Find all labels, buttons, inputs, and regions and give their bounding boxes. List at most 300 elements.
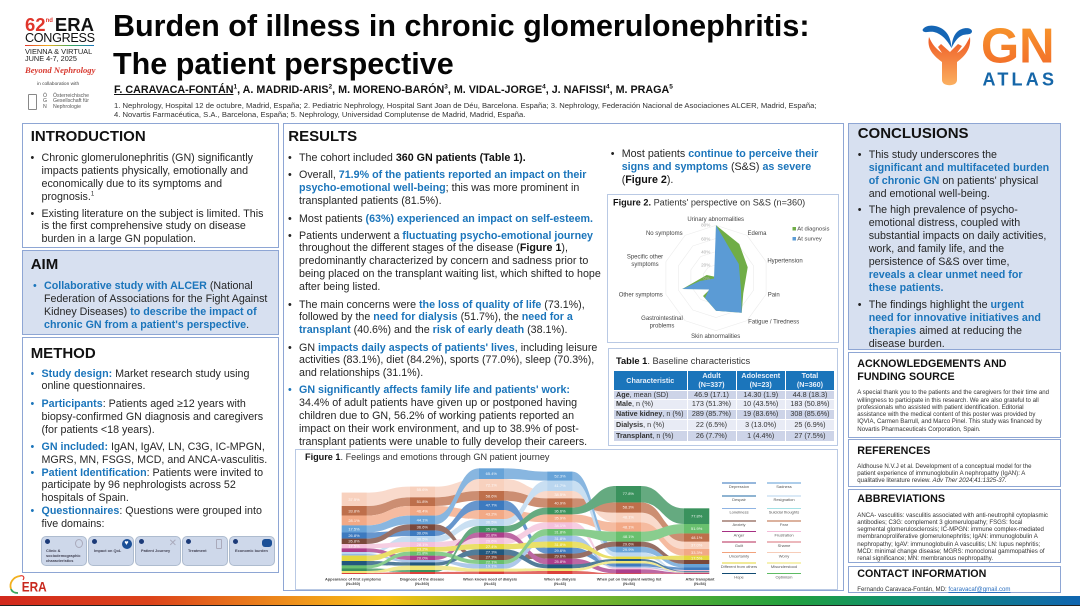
table 1: baseline characteristics: 183 (50.8%) — [790, 400, 830, 408]
text: patient identification: participate by 96 nephrologists across 52 — [42, 479, 236, 491]
text: conclusion 3: need for innovative initiatives and — [869, 312, 1041, 324]
footer black line — [0, 604, 1080, 606]
GN Atlas logo: GN — [981, 20, 1054, 74]
sankey percentage labels: 36.5% — [486, 520, 497, 525]
sankey percentage labels: 28.1% — [417, 542, 428, 547]
table 1: baseline characteristics: Age, mean (SD) — [616, 390, 668, 399]
congress logo: Österreichische — [53, 93, 89, 99]
axis labels: Urinary abnormalities — [687, 217, 744, 223]
text: conclusion 2: reveals a clear unmet need for — [869, 269, 1023, 281]
congress logo: Beyond Nephrology — [25, 65, 95, 75]
text: conclusion 2: substantial impacts on daily activities, — [869, 230, 1046, 242]
text: study design: online questionnaires. — [42, 380, 145, 392]
sankey percentage labels: 43.2% — [486, 512, 497, 517]
text: signs and symptoms: signs and symptoms (S&S) as severe — [622, 161, 811, 173]
text: family and work — [299, 384, 587, 449]
legend: Fear — [780, 522, 789, 527]
sankey percentage labels: 77.8% — [691, 514, 703, 519]
text: reference: patient experience of immunoglobulin A nephropathy (IgAN): A — [857, 470, 1025, 477]
text: literature gap: is the first comprehensive study on disease — [42, 220, 246, 232]
sankey percentage labels: 30.5% — [417, 536, 428, 541]
text: acknowledgements: A special thank you to the patients and the caregivers for their time and — [857, 389, 1049, 396]
text: abbreviations — [857, 512, 1048, 562]
axis labels: Appearance of first symptoms — [325, 577, 381, 582]
text: aim statement: Kidney Diseases) to describe the impact of — [44, 306, 257, 318]
heading: aim: AIM — [31, 256, 58, 273]
sankey percentage labels: 36.6% — [417, 525, 428, 530]
table 1: baseline characteristics: 10 (43.5%) — [743, 400, 778, 408]
figure 2: radar chart — [607, 194, 839, 343]
text: aim statement — [44, 280, 267, 332]
table 1 box — [608, 348, 838, 446]
legend — [721, 483, 801, 580]
sankey percentage labels: 26.8% — [348, 533, 360, 538]
text: acknowledgements — [857, 389, 1049, 433]
text: conclusion 1: and emotional well-being. — [869, 188, 990, 200]
text: literature gap — [42, 208, 263, 246]
domain 1: Clinic & — [46, 548, 60, 553]
legend: Sadness — [776, 484, 792, 489]
affiliations: 1. Nephrology, Hospital 12 de octubre, Madrid, España; 2. Pediatric Nephrology, Hospital Sant Joan de Déu, Barcelona. España; 3. Nephrology, Federación Nacional de Asociaciones ALCER, Madrid, España; — [114, 101, 816, 110]
congress logo: VIENNA & VIRTUAL — [25, 46, 92, 56]
affiliations — [114, 101, 816, 119]
axis labels: Hypertension — [767, 259, 803, 265]
text: reference — [857, 463, 1032, 484]
axis labels: When knows need of dialysis — [463, 577, 517, 582]
text: cohort: The cohort included 360 GN patients (Table 1). — [299, 152, 526, 164]
sankey percentage labels: 22.1% — [486, 559, 497, 564]
congress logo: Ö — [43, 93, 47, 99]
affiliations: 4. Novartis Farmacéutica, S.A., Barcelona, España; 5. Nephrology, Universidad Complutense de Madrid, Madrid, España. — [114, 110, 525, 119]
heading: conclusions: CONCLUSIONS — [858, 125, 969, 142]
text: main concerns: The main concerns were the loss of quality of life (73.1%), — [299, 299, 585, 311]
table 1 title: Table 1. Baseline characteristics — [616, 356, 750, 366]
axis labels: (N=43) — [484, 581, 497, 586]
table 1: baseline characteristics: 22 (6.5%) — [696, 420, 727, 429]
sankey percentage labels: 17.5% — [348, 526, 360, 531]
sankey percentage labels: 35.8% — [486, 526, 497, 531]
text: family and work: 34.4% of adult patients have given up or postponed having — [299, 397, 577, 409]
axis labels: Other symptoms — [619, 293, 663, 299]
axis labels: Fatigue / Tiredness — [748, 320, 799, 326]
text: abbreviations: MCD: minimal change disease; MGRS: monoclonal gammopathies of — [857, 548, 1045, 555]
congress logo: CONGRESS — [25, 31, 95, 45]
text: participants: biopsy-confirmed GN diagnosis and caregivers — [42, 411, 263, 423]
text: conclusion 2: The high prevalence of psycho- — [869, 204, 1018, 216]
series: at diagnosis — [682, 225, 748, 313]
table 1: baseline characteristics: 19 (83.6%) — [743, 409, 778, 418]
text: acknowledgements: IQVIA, Carmen Barrull, and Marco Pinel. This study was financed by — [857, 418, 1042, 425]
text: GN included: GN included: IgAN, IgAV, LN, C3G, IC-MPGN, — [42, 441, 265, 453]
legend: Anxiety — [732, 522, 746, 527]
heading: abbreviations: ABBREVIATIONS — [857, 493, 945, 505]
heading: method: METHOD — [31, 345, 96, 362]
axis labels: When on dialysis — [544, 577, 576, 582]
table 1: baseline characteristics: (N=360) — [797, 380, 823, 389]
text: GN impact: impacts patients physically, emotionally and — [42, 165, 248, 177]
table 1: baseline characteristics: (N=337) — [698, 380, 725, 389]
sankey percentage labels: 31.8% — [554, 536, 566, 541]
text: patient identification — [42, 467, 263, 505]
text: main concerns: transplant (40.6%) and the risk of early death (38.1%). — [299, 324, 568, 336]
congress logo: JUNE 4-7, 2025 — [25, 54, 77, 62]
legend: Guilt — [735, 543, 744, 548]
sankey percentage labels: 52.3% — [554, 473, 566, 478]
sankey percentage labels: 29.6% — [623, 541, 634, 546]
text: GN impact: prognosis.1 — [42, 191, 94, 203]
panel: results — [283, 123, 844, 591]
text: abbreviations: membranoproliferative glomerulonephritis; IgAN: immunoglobulin A — [857, 533, 1038, 540]
sankey percentage labels: 48.1% — [623, 524, 634, 529]
congress logo: Nephrologie — [53, 104, 81, 110]
sankey percentage labels: 72.1% — [486, 482, 497, 487]
text: conclusion 2: these patients. — [869, 282, 944, 294]
sankey percentage labels: 47.7% — [486, 503, 497, 508]
sankey percentage labels: 51.9% — [691, 526, 703, 531]
sankey percentage labels: 48.1% — [623, 534, 634, 539]
sankey percentage labels: 36.6% — [554, 508, 566, 513]
panel: abbreviations — [848, 489, 1061, 563]
sankey percentage labels: 33.8% — [348, 508, 360, 513]
axis labels: No symptoms — [646, 231, 683, 237]
axis labels: Edema — [747, 231, 767, 237]
domain 2 — [88, 536, 134, 566]
sankey percentage labels: 65.4% — [486, 471, 497, 476]
text: conclusion 1 — [869, 149, 1049, 200]
table 1: baseline characteristics: 1 (4.4%) — [747, 431, 774, 440]
congress logo: N — [43, 104, 47, 110]
sankey percentage labels: 31.8% — [554, 530, 566, 535]
axis labels: Specific other — [627, 255, 663, 261]
tick labels: 20% — [701, 262, 710, 268]
heading: results: RESULTS — [288, 128, 357, 145]
text: conclusion 1: of chronic GN on patients' physical — [869, 175, 1038, 187]
legend: Resignation — [773, 497, 795, 502]
heading: introduction: INTRODUCTION — [31, 128, 146, 145]
figure 2 title: Figure 2. Patients' perspective on S&S (n=360) — [613, 198, 805, 208]
sankey percentage labels: 38.5% — [554, 492, 566, 497]
text: daily aspects: and relationships (31.1%). — [299, 367, 423, 379]
sankey percentage labels: 41.7% — [554, 483, 566, 488]
table 1: baseline characteristics: 26 (7.7%) — [696, 431, 727, 440]
panel: conclusions — [848, 123, 1061, 350]
axis labels: problems — [650, 323, 674, 329]
text: conclusion 3 — [869, 299, 1041, 350]
ERA logo — [10, 575, 47, 594]
sankey percentage labels: 23.2% — [417, 547, 428, 552]
figure 1: sankey chart — [295, 449, 838, 590]
legend: Depression — [729, 484, 749, 489]
legend: Hope — [734, 574, 745, 580]
heading: contact: CONTACT INFORMATION — [857, 568, 986, 580]
table 1: baseline characteristics: 14.30 (1.9) — [743, 390, 778, 399]
sankey percentage labels: 40.9% — [554, 500, 566, 505]
congress logo: G — [43, 98, 47, 104]
text: family and work: impact on their work environment, and up to 38.9% of post- — [299, 423, 579, 435]
text: literature gap: Existing literature on the subject is limited. This — [42, 208, 263, 220]
text: GN included: MGRS, MN, FSGS, MCD, and ANCA-vasculitis. — [42, 454, 267, 466]
congress logo: in collaboration with — [37, 82, 79, 86]
sankey percentage labels: 21.8% — [417, 551, 428, 556]
panel: acknowledgements — [848, 352, 1061, 438]
congress logo: Gesellschaft für — [53, 98, 89, 104]
figure 1 title: Figure 1. Feelings and emotions through GN patient journey — [305, 452, 550, 462]
text: abbreviations: renal significance; MN: membranous nephropathy. — [857, 555, 993, 562]
table 1: baseline characteristics: 173 (51.3%) — [692, 400, 731, 408]
sankey percentage labels: 20.0% — [417, 555, 428, 560]
legend: Anger — [734, 532, 745, 538]
domain 2: ♥ — [124, 540, 129, 547]
text: GN included — [42, 441, 267, 467]
table 1: baseline characteristics: 3 (13.0%) — [745, 420, 776, 429]
text: participants: Participants: Patients aged ≥12 years with — [42, 398, 246, 410]
axis labels: (N=54) — [623, 581, 636, 586]
text: journey: being placed on the transplant waiting list, which shifted to hope — [299, 268, 601, 280]
table 1: baseline characteristics: 46.9 (17.1) — [694, 390, 729, 399]
panel: references — [848, 439, 1061, 487]
legend: Despair — [732, 497, 747, 502]
rainbow footer bar — [0, 596, 1080, 604]
text: conclusion 2 — [869, 204, 1046, 295]
axis labels: (N=360) — [346, 581, 361, 586]
text: acknowledgements: willingness to participate in this research. We are also grateful to all — [857, 397, 1039, 404]
title: The patient perspective — [113, 47, 454, 81]
table 1: baseline characteristics: (N=23) — [750, 380, 772, 389]
text: GN impact — [42, 152, 253, 204]
table 1: baseline characteristics: Transplant, n (%) — [616, 431, 674, 440]
text: family and work: children due to GN, 56.2% of working patients reported an — [299, 410, 574, 422]
text: aim statement: Federation of Associations for the Fight Against — [44, 293, 267, 305]
axis labels: (N=54) — [694, 581, 707, 586]
sankey percentage labels: 17.5% — [348, 544, 360, 549]
domain 1: characteristics — [46, 558, 73, 563]
text: conclusion 3: disease burden. — [869, 338, 945, 350]
sankey column blocks — [342, 468, 709, 574]
sankey percentage labels: 58.3% — [623, 504, 634, 509]
text: reference: qualitative literature review. Adv Ther 2024;41:1325-37. — [857, 477, 1007, 484]
domain 1: sociodemographic — [46, 553, 81, 558]
tick labels — [701, 223, 710, 281]
panel: aim — [22, 250, 278, 335]
text: acknowledgements: Novartis Pharmaceuticals Corporation, Spain. — [857, 426, 981, 433]
domain 5: Economic burden — [235, 548, 268, 553]
legend — [792, 227, 829, 243]
sankey percentage labels: 48.1% — [691, 535, 703, 540]
text: main concerns: followed by the need for dialysis (51.7%), the need for a — [299, 311, 573, 323]
text: family and work: GN significantly affects family life and patients' work: — [299, 384, 570, 396]
text: GN impact: economically due to its symptoms and — [42, 178, 222, 190]
domain 4 — [182, 536, 228, 566]
axis labels: Skin abnormalities — [691, 334, 740, 340]
table 1: baseline characteristics: 308 (85.6%) — [790, 409, 830, 418]
sankey percentage labels: 27.4% — [486, 544, 497, 549]
sankey percentage labels: 48.1% — [623, 515, 634, 520]
sankey percentage labels: 27.3% — [486, 555, 497, 560]
series: at survey — [682, 225, 742, 313]
heading: references: REFERENCES — [857, 445, 930, 457]
title — [113, 9, 809, 81]
authors: F. CARAVACA-FONTÁN1, A. MADRID-ARIS2, M. MORENO-BARÓN3, M. VIDAL-JORGE4, J. NAFISSI4, M. PRAGA5 — [114, 83, 673, 96]
sankey percentage labels: 29.6% — [554, 553, 566, 558]
table 1: baseline characteristics: 44.8 (18.3) — [793, 390, 827, 399]
text: reference: Aldhouse N.V.J et al. Development of a conceptual model for the — [857, 463, 1032, 470]
domain 3: ✕ — [169, 538, 177, 549]
axis labels: When put on transplant waiting list — [597, 577, 662, 582]
text: abbreviations: antibodies; C3G: complement 3 glomerulopathy; FSGS: focal — [857, 519, 1022, 526]
heading: acknowledgements — [857, 358, 1007, 383]
table 1: baseline characteristics: Native kidney, n (%) — [616, 409, 684, 418]
tick labels: 60% — [701, 236, 710, 242]
tick labels: 40% — [701, 250, 710, 254]
text: self-esteem: Most patients (63%) experienced an impact on self-esteem. — [299, 213, 593, 225]
text: daily aspects: activities (83.1%), diet (84.2%), sports (77.0%), sleep (70.3%), — [299, 354, 594, 366]
text: signs and symptoms: Most patients continue to perceive their — [622, 148, 818, 160]
table 1: baseline characteristics: 27 (7.5%) — [794, 431, 826, 440]
text: acknowledgements: professionals who assisted with patient identification. Editorial — [857, 404, 1024, 411]
table 1: baseline characteristics: Dialysis, n (%) — [616, 420, 664, 429]
legend: At diagnosis — [797, 227, 829, 233]
sankey percentage labels: 19.1% — [486, 564, 497, 569]
legend: Frustration — [774, 532, 794, 538]
sankey percentage labels: 28.1% — [348, 518, 360, 523]
axis labels: symptoms — [631, 262, 659, 268]
legend: Worry — [779, 554, 789, 558]
text: abbreviations: ANCA- vasculitis: vasculitis associated with anti-neutrophil cytoplasmic — [857, 512, 1048, 519]
sankey percentage labels: 31.8% — [554, 542, 566, 547]
text: abbreviations: segmental glomerulosclerosis; IC-MPGN: immune complex-mediated — [857, 526, 1044, 533]
table 1: baseline characteristics: 289 (85.7%) — [692, 409, 731, 418]
sankey percentage labels: 31.8% — [486, 532, 497, 537]
sankey percentage labels: 25.8% — [554, 559, 566, 564]
panel: method — [22, 337, 278, 573]
panel: contact information — [848, 566, 1061, 593]
text: contact: Fernando Caravaca-Fontán, MD: fcaravacaf@gmail.com — [857, 586, 1010, 593]
legend: Misunderstood — [771, 564, 797, 569]
text: literature gap: burden in a large GN population. — [42, 233, 196, 245]
sankey percentage labels: 55.6% — [417, 487, 428, 492]
legend: Loneliness — [729, 510, 749, 514]
axis labels: (N=360) — [415, 581, 430, 586]
sankey percentage labels: 77.8% — [623, 491, 634, 496]
text: journey — [299, 230, 601, 294]
domain 1 — [41, 536, 87, 566]
text: questionnaires: five domains: — [42, 518, 104, 530]
sankey percentage labels: 27.3% — [486, 549, 497, 554]
table 1: baseline characteristics: Male, n (%) — [616, 400, 653, 408]
text: daily aspects — [299, 342, 597, 380]
GN Atlas logo — [922, 20, 1057, 90]
sankey percentage labels: 29.9% — [623, 547, 634, 552]
table 1: baseline characteristics: Total — [802, 371, 818, 380]
legend: Optimism — [776, 574, 793, 580]
sankey percentage labels: 51.8% — [417, 499, 428, 504]
text: journey: predominantly characterized by concern and sadness prior to — [299, 255, 588, 267]
text: abbreviations: nephropathy; IgAV: immunoglobulin A vasculitis; LN: lupus nephritis; — [857, 541, 1040, 548]
axis labels — [619, 217, 803, 340]
tick labels: 0% — [703, 276, 710, 281]
text: conclusion 3: therapies aimed at reducing the — [869, 325, 1022, 337]
domain 4: Treatment — [188, 548, 207, 553]
text: conclusion 1: significant and multifaceted burden — [869, 162, 1049, 174]
domain 5 — [229, 536, 275, 566]
heading: acknowledgements: FUNDING SOURCE — [857, 371, 955, 383]
table 1: baseline characteristics — [614, 371, 834, 441]
axis labels: Diagnose of the disease — [400, 577, 445, 582]
text: aim statement: chronic GN from a patient's perspective. — [44, 319, 249, 331]
text: study design: Study design: Market research study using — [42, 368, 249, 380]
table 1: baseline characteristics: Adolescent — [741, 371, 780, 380]
text: journey: Patients underwent a fluctuating psycho-emotional journey — [299, 230, 593, 242]
sankey percentage labels: 29.6% — [554, 548, 566, 553]
panel: introduction — [22, 123, 278, 248]
text: GN impact: Chronic glomerulonephritis (GN) significantly — [42, 152, 253, 164]
axis labels: Gastrointestinal — [641, 316, 683, 322]
text: patient identification: hospitals of Spain. — [42, 492, 129, 504]
axis labels: Pain — [768, 293, 780, 299]
text: psycho-emotional: Overall, 71.9% of the patients reported an impact on their — [299, 169, 586, 181]
text: psycho-emotional: psycho-emotional well-being; this was more prominent in — [299, 182, 579, 194]
text: signs and symptoms — [622, 148, 818, 187]
sankey percentage labels: 30.0% — [417, 531, 428, 536]
legend: Suicidal thoughts — [769, 510, 799, 514]
text: conclusion 2: emotional distress, coupled with — [869, 217, 1020, 229]
sankey percentage labels: 33.3% — [691, 550, 703, 555]
text: psycho-emotional — [299, 169, 586, 208]
tick labels: 80% — [701, 223, 710, 228]
text: conclusion 1: This study underscores the — [869, 149, 997, 161]
legend: Shame — [778, 543, 791, 548]
sankey percentage labels: 46.4% — [417, 508, 428, 513]
text: study design — [42, 368, 249, 393]
sankey percentage labels: 17.5% — [691, 555, 703, 560]
axis labels: (N=43) — [554, 581, 567, 586]
table 1: baseline characteristics: Characteristic — [626, 376, 674, 385]
text: patient identification: Patient Identification: Patients were invited to — [42, 467, 263, 479]
sankey ribbons — [342, 468, 709, 574]
table 1: baseline characteristics: 25 (6.9%) — [794, 420, 826, 429]
heading: acknowledgements: ACKNOWLEDGEMENTS AND — [857, 358, 1007, 370]
text: psycho-emotional: transplanted patients (81.5%). — [299, 195, 442, 207]
text: journey: after being listed. — [299, 281, 380, 293]
sankey percentage labels: 58.6% — [486, 493, 497, 498]
GN Atlas logo: ATLAS — [982, 70, 1057, 90]
text: acknowledgements: assistance with the medical content of this poster was provided by — [857, 411, 1035, 418]
text: aim statement: Collaborative study with ALCER (National — [44, 280, 253, 292]
text: questionnaires — [42, 505, 262, 531]
title: Burden of illness in chronic glomerulonephritis: — [113, 9, 809, 43]
text: daily aspects: GN impacts daily aspects of patients' lives, including leisure — [299, 342, 597, 354]
sankey percentage labels: 44.1% — [417, 517, 428, 522]
sankey percentage labels: 26.8% — [348, 539, 360, 544]
sankey percentage labels: 37.5% — [348, 497, 360, 502]
domain 3: Patient Journey — [141, 548, 170, 553]
sankey percentage labels: 29.6% — [486, 538, 497, 543]
text: questionnaires: Questionnaires: Questions were grouped into — [42, 505, 262, 517]
text: signs and symptoms: (Figure 2). — [622, 174, 673, 186]
text: conclusion 2: persistence of S&S over time, — [869, 256, 1009, 268]
axis labels — [325, 577, 715, 586]
sankey percentage labels: 37.0% — [691, 543, 703, 548]
domain 3 — [135, 536, 181, 566]
congress logo: 62ndERA — [25, 14, 94, 35]
legend: Uncertainty — [729, 554, 749, 558]
text: main concerns — [299, 299, 585, 337]
text: participants: (for patients <18 years). — [42, 424, 155, 436]
sankey percentage labels: 34.1% — [554, 523, 566, 528]
congress logo — [24, 14, 96, 110]
domain 2: Impact on QoL — [94, 548, 121, 553]
sankey percentage labels: 35.9% — [554, 516, 566, 521]
